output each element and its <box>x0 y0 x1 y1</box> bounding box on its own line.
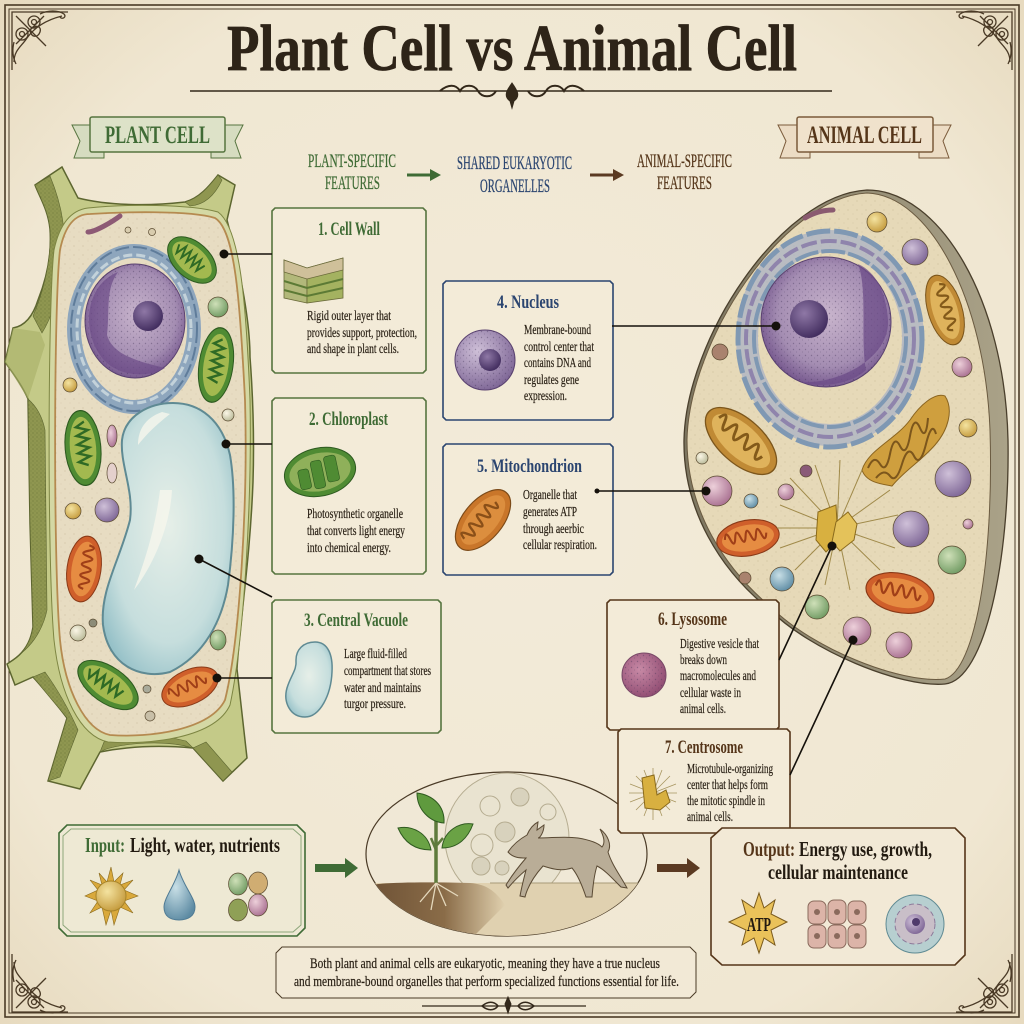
icon: nucleus <box>455 330 515 390</box>
icon: vacuole <box>286 642 332 717</box>
flow: plant-specific features <box>308 151 396 194</box>
banner: plant cell: PLANT CELL <box>105 122 210 149</box>
flow: plant-specific features: PLANT-SPECIFIC <box>308 151 396 172</box>
panel: input: Input: <box>85 833 125 857</box>
icon: ATP burst: ATP <box>747 914 771 936</box>
input to output illustration <box>360 772 650 940</box>
plant golgi <box>88 216 120 232</box>
panel: central vacuole: turgor pressure. <box>344 696 406 711</box>
arrow: brown flow <box>590 169 624 181</box>
panel: chloroplast: Photosynthetic organelle <box>307 506 403 521</box>
wall shaded faces <box>13 175 232 781</box>
panel: centrosome: Microtubule-organizing <box>687 761 773 776</box>
panel: mitochondrion <box>443 444 613 575</box>
panel: output <box>711 828 965 965</box>
icon: centrosome <box>629 768 677 820</box>
panel: nucleus: 4. Nucleus <box>497 293 559 313</box>
bottom ornament <box>422 997 586 1013</box>
panel: central vacuole: water and maintains <box>344 680 421 695</box>
animal centrosome <box>777 460 898 590</box>
animal endoplasmic reticulum <box>738 231 922 447</box>
callout: summary note: Both plant and animal cells are eukaryotic, meaning they have a true nucleus <box>310 956 660 972</box>
title: Plant Cell vs Animal Cell <box>227 12 797 85</box>
panel: output: Output: <box>743 837 795 861</box>
panel: nucleus: regulates gene <box>524 372 579 387</box>
panel: lysosome: animal cells. <box>680 701 726 716</box>
icon: nutrients <box>228 872 268 921</box>
animal cell diagram <box>684 190 1008 684</box>
arrow: input to scene <box>315 858 358 878</box>
animal small organelles <box>696 210 977 658</box>
panel: lysosome <box>607 600 779 730</box>
plant cell diagram <box>5 167 254 789</box>
panel: mitochondrion: cellular respiration. <box>523 537 597 552</box>
flow: shared eukaryotic organelles: ORGANELLES <box>480 176 550 197</box>
panel: cell wall: Rigid outer layer that <box>307 308 391 323</box>
icon: lysosome <box>622 653 666 697</box>
icon: cell <box>886 895 944 953</box>
animal nucleus <box>761 257 891 387</box>
panel: nucleus <box>443 281 613 420</box>
panel: input <box>59 825 305 936</box>
panel: chloroplast: into chemical energy. <box>307 540 391 555</box>
panel: central vacuole: compartment that stores <box>344 663 431 678</box>
flow: animal-specific features: FEATURES <box>657 173 712 194</box>
panel: mitochondrion: Organelle that <box>523 487 577 502</box>
icon: sun <box>85 867 138 925</box>
callout: summary note: and membrane-bound organelles that perform specialized functions essential for life. <box>294 974 679 990</box>
panel: lysosome: cellular waste in <box>680 685 741 700</box>
ghost cell circle <box>444 772 570 883</box>
panel: central vacuole <box>272 600 441 733</box>
panel: lysosome: macromolecules and <box>680 668 756 683</box>
panel: central vacuole: Large fluid-filled <box>344 646 407 661</box>
flow: animal-specific features: ANIMAL-SPECIFIC <box>637 151 732 172</box>
panel: nucleus: control center that <box>524 339 594 354</box>
panel: centrosome: 7. Centrosome <box>665 738 743 758</box>
banner: plant cell <box>72 117 243 158</box>
icon: mitochondrion <box>445 480 521 560</box>
panel: nucleus: expression. <box>524 388 567 403</box>
panel: centrosome: the mitotic spindle in <box>687 793 765 808</box>
animal cytoplasm <box>687 193 991 679</box>
panel: cell wall: and shape in plant cells. <box>307 341 399 356</box>
panel: nucleus: Membrane-bound <box>524 322 591 337</box>
soil <box>376 882 502 934</box>
plant endoplasmic reticulum <box>71 247 197 411</box>
banner: animal cell: ANIMAL CELL <box>807 122 922 149</box>
flow: shared eukaryotic organelles <box>457 153 572 197</box>
panel: cell wall: 1. Cell Wall <box>318 220 380 240</box>
plant sprout <box>398 793 473 910</box>
panel: centrosome <box>618 729 790 833</box>
panel: chloroplast: 2. Chloroplast <box>309 410 389 430</box>
flow: animal-specific features <box>637 151 732 194</box>
callout: summary note <box>276 947 696 998</box>
panel: chloroplast: that converts light energy <box>307 523 405 538</box>
plant cytoplasm <box>55 212 246 736</box>
animal golgi apparatus <box>862 395 949 486</box>
icon: chloroplast <box>280 441 360 503</box>
flow: plant-specific features: FEATURES <box>325 173 380 194</box>
panel: centrosome: center that helps form <box>687 777 768 792</box>
panel: centrosome: animal cells. <box>687 809 733 824</box>
panel: chloroplast <box>272 398 426 574</box>
banner: animal cell <box>778 117 951 158</box>
ground <box>375 883 638 936</box>
panel: lysosome: breaks down <box>680 652 727 667</box>
panel: lysosome: 6. Lysosome <box>658 610 727 630</box>
rabbit <box>506 822 627 897</box>
panel: central vacuole: 3. Central Vacuole <box>304 611 408 631</box>
panel: mitochondrion: 5. Mitochondrion <box>477 457 583 477</box>
plant inner wall band <box>49 205 250 743</box>
flow: shared eukaryotic organelles: SHARED EUKARYOTIC <box>457 153 572 174</box>
plant mitochondria <box>63 534 224 715</box>
leader lines <box>194 250 858 775</box>
panel: mitochondrion: through aeerbic <box>523 521 584 536</box>
panel: input: Light, water, nutrients <box>130 833 280 857</box>
panel: output: cellular maintenance <box>768 860 908 884</box>
panel: lysosome: Digestive vesicle that <box>680 636 759 651</box>
icon: ATP burst <box>729 893 787 953</box>
icon: tissue cells <box>808 900 866 948</box>
title divider ornament <box>190 83 832 108</box>
plant chloroplasts <box>62 228 238 719</box>
icon: water drop <box>164 870 195 920</box>
animal mitochondria <box>694 271 972 619</box>
arrow: scene to output <box>657 858 700 878</box>
arrow: green flow <box>407 169 441 181</box>
panel: cell wall: provides support, protection, <box>307 325 417 340</box>
plant small organelles <box>63 227 234 721</box>
panel: mitochondrion: generates ATP <box>523 504 577 519</box>
panel: cell wall <box>272 208 426 373</box>
icon: cell wall <box>284 258 343 303</box>
panel: output: Energy use, growth, <box>799 837 932 861</box>
animal cell outer membrane <box>684 190 1008 684</box>
plant cell wall <box>5 167 254 789</box>
plant central vacuole <box>103 403 234 674</box>
plant nucleus <box>85 264 185 378</box>
panel: nucleus: contains DNA and <box>524 355 591 370</box>
